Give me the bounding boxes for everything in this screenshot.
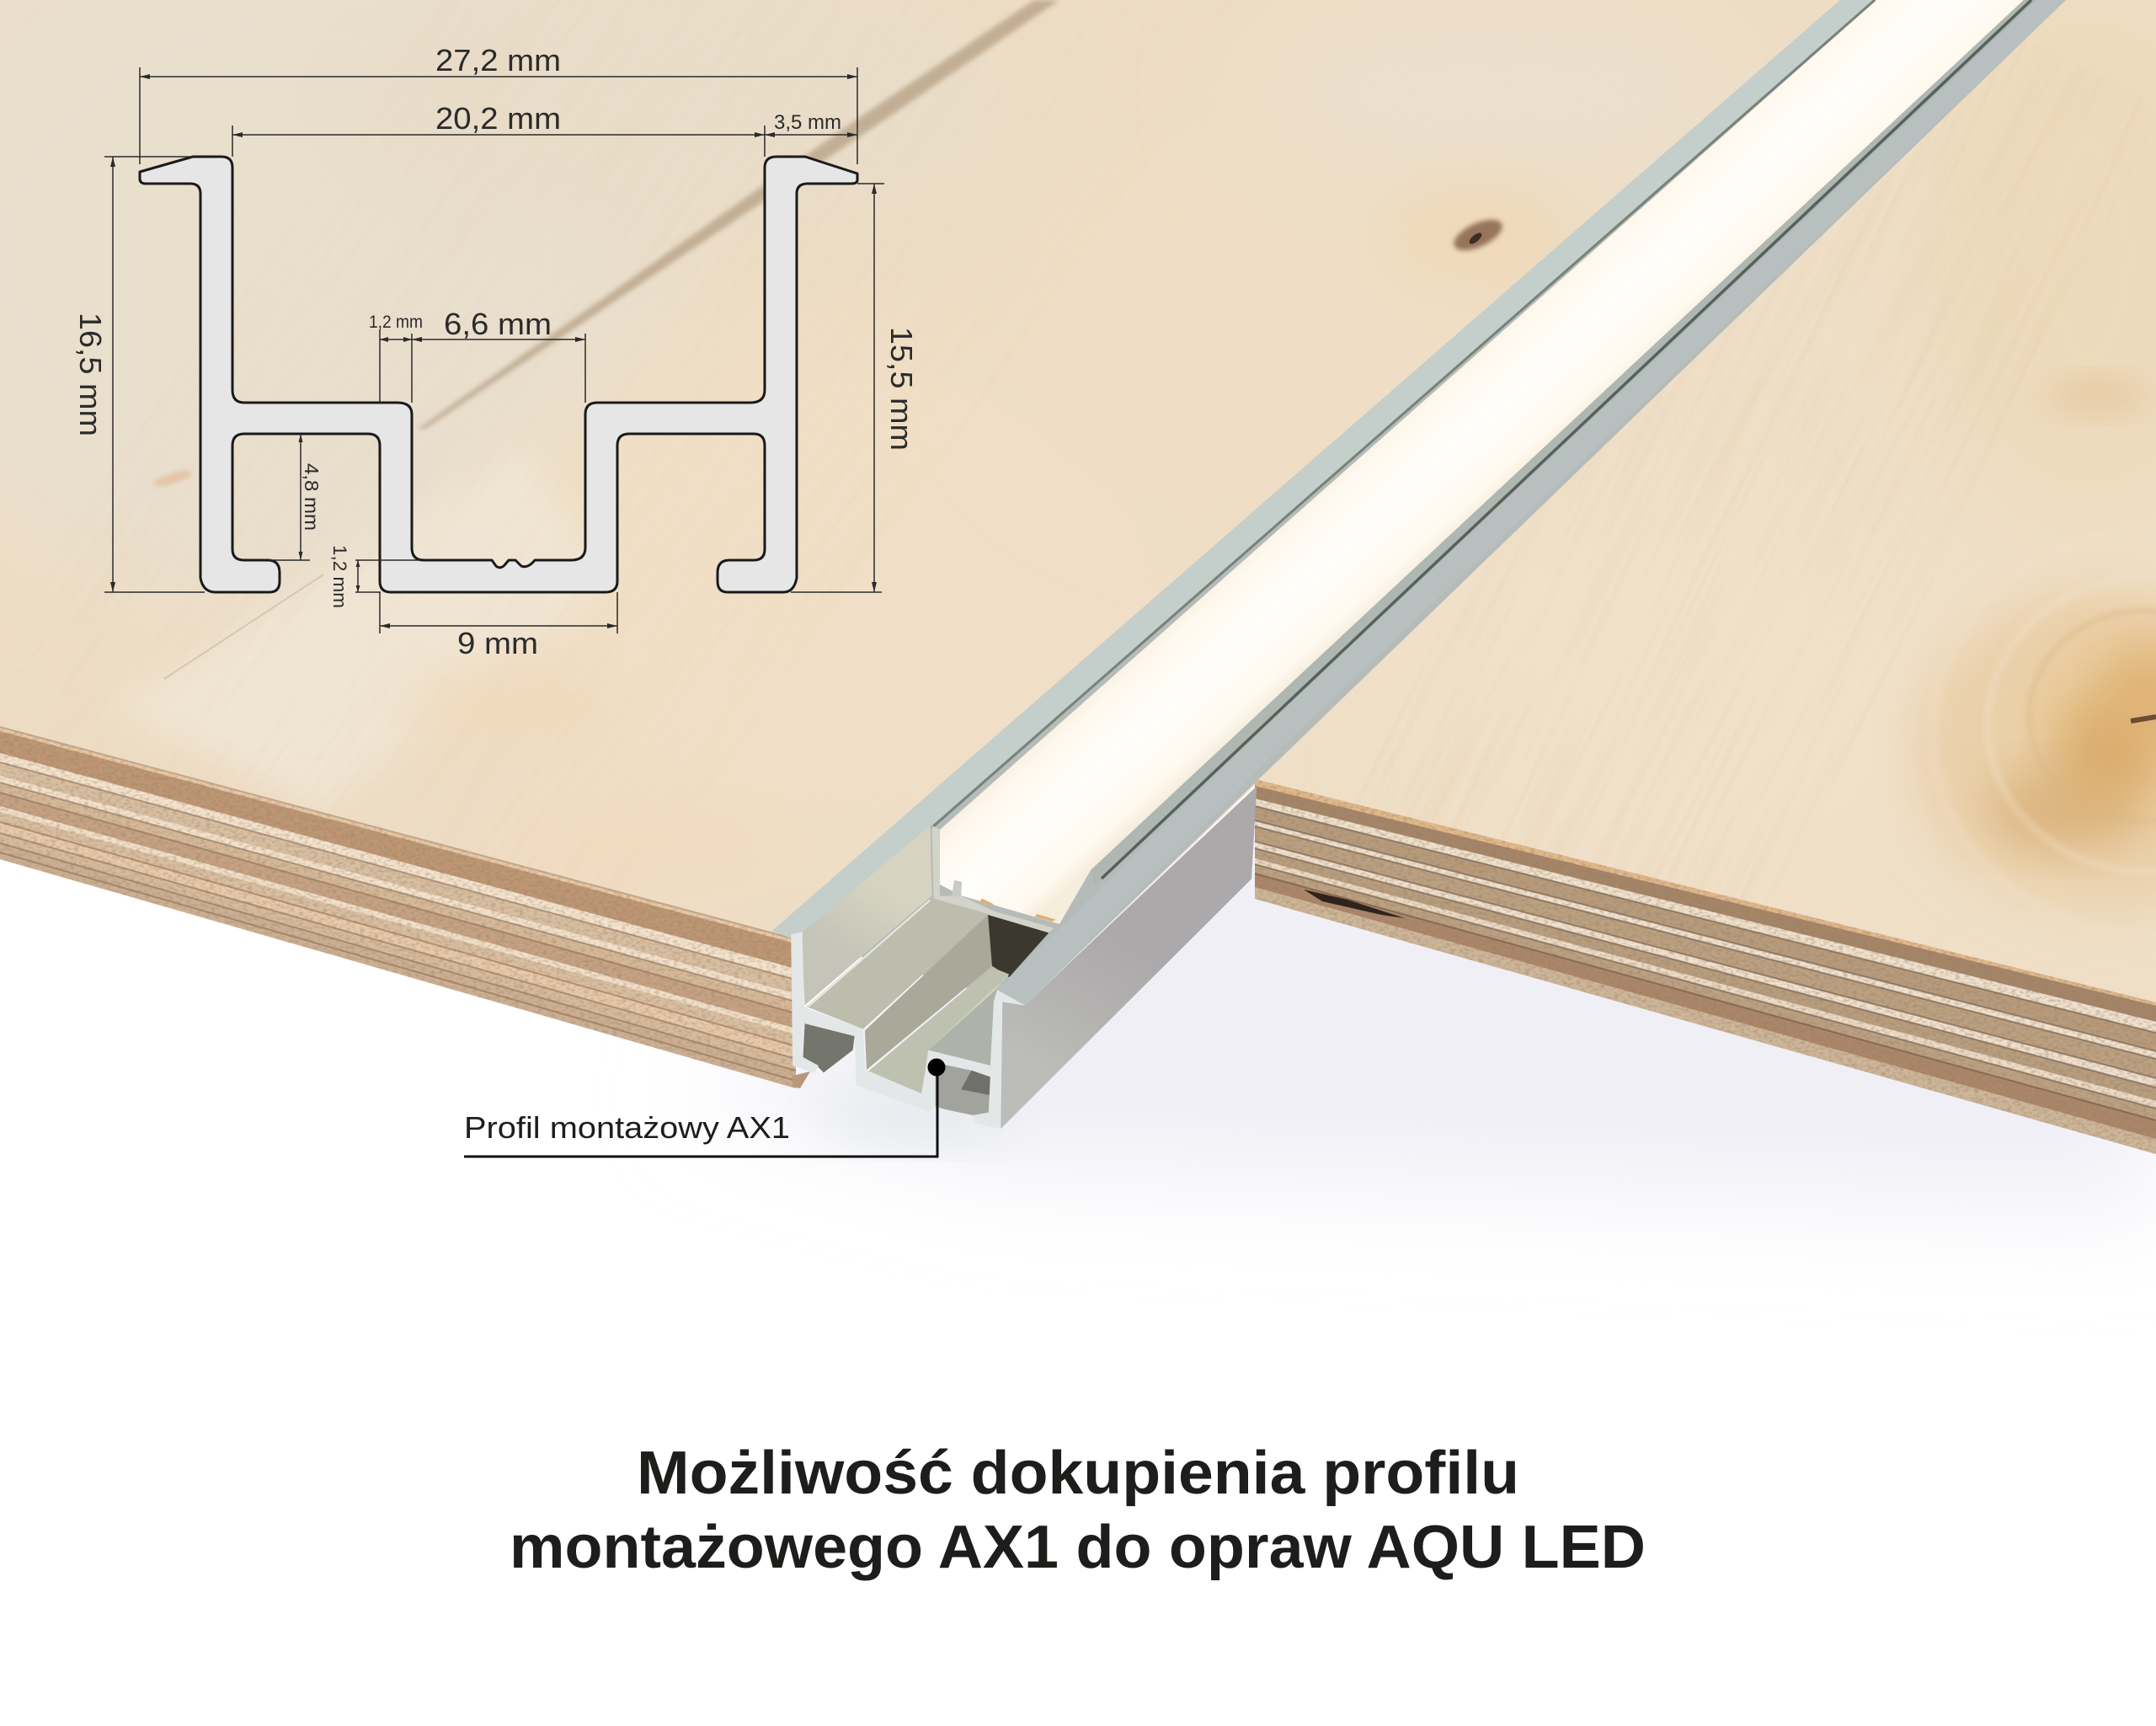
knot on the left board <box>1449 213 1507 257</box>
dimension 9 mm: 9 mm <box>457 626 538 660</box>
right board plywood edge <box>1255 779 2156 1154</box>
dimension 1,2 mm side: 1,2 mm <box>329 545 350 608</box>
delamination gap <box>1304 890 1405 918</box>
dimension 27,2 mm: 27,2 mm <box>435 43 561 77</box>
board seam <box>417 0 1059 430</box>
dimension 4,8 mm: 4,8 mm <box>301 463 323 531</box>
left dark slit <box>931 0 1875 828</box>
right step <box>928 988 997 1066</box>
channel right wall <box>921 975 1009 1093</box>
channel dark back <box>988 915 1049 977</box>
knot halo <box>1398 183 1558 277</box>
luminaire front cross-section and interior <box>791 786 1257 1129</box>
aluminium cross-section face <box>791 932 1025 1129</box>
left flange <box>772 0 1875 938</box>
dimension 15,5 mm: 15,5 mm <box>884 327 919 451</box>
first step floor <box>807 898 989 1029</box>
floor shadow <box>691 809 2156 1213</box>
right flange rail <box>997 0 2066 1005</box>
right outer wall <box>1001 786 1257 1129</box>
dimension lines <box>104 67 884 633</box>
right dark slit <box>1102 0 2031 879</box>
profile cross-section outline <box>140 157 857 592</box>
callout dot <box>928 1058 945 1077</box>
body base <box>772 0 2066 1005</box>
LED luminaire long body <box>772 0 2066 1005</box>
channel left wall <box>865 915 992 1070</box>
dimension 16,5 mm: 16,5 mm <box>73 313 108 436</box>
left inner wall <box>801 826 932 1005</box>
light plank <box>133 469 583 799</box>
callout label: Profil montażowy AX1 <box>464 1110 790 1145</box>
title <box>510 1440 1646 1581</box>
right board tones <box>1908 39 2156 917</box>
left board plywood edge <box>0 727 810 1088</box>
callout leader line <box>464 1070 937 1157</box>
dimension 20,2 mm: 20,2 mm <box>435 101 561 136</box>
wood board top surfaces <box>0 0 2156 1005</box>
opal lens <box>940 0 2024 924</box>
title line 2: montażowego AX1 do opraw AQU LED <box>510 1514 1646 1581</box>
right inner strip <box>1091 0 2036 886</box>
pink blotches <box>413 666 504 722</box>
large knot with rings <box>1912 531 2156 935</box>
dimension arrowheads <box>110 74 877 628</box>
lens lip <box>932 826 1054 932</box>
dark opening right <box>936 1063 990 1115</box>
wood grain left <box>0 0 1433 1136</box>
title line 1: Możliwość dokupienia profilu <box>637 1440 1519 1507</box>
dimension 3,5 mm: 3,5 mm <box>774 111 841 134</box>
lens warm spots <box>980 899 1055 922</box>
dimension 1,2 mm top: 1,2 mm <box>369 313 423 332</box>
channel floor <box>868 967 1009 1093</box>
dimension 6,6 mm: 6,6 mm <box>444 307 552 341</box>
callout: Profil montażowy AX1 <box>464 1058 945 1157</box>
technical drawing of profile <box>73 43 919 660</box>
wood grain right <box>1305 0 2156 1090</box>
dark opening left <box>803 1023 855 1072</box>
